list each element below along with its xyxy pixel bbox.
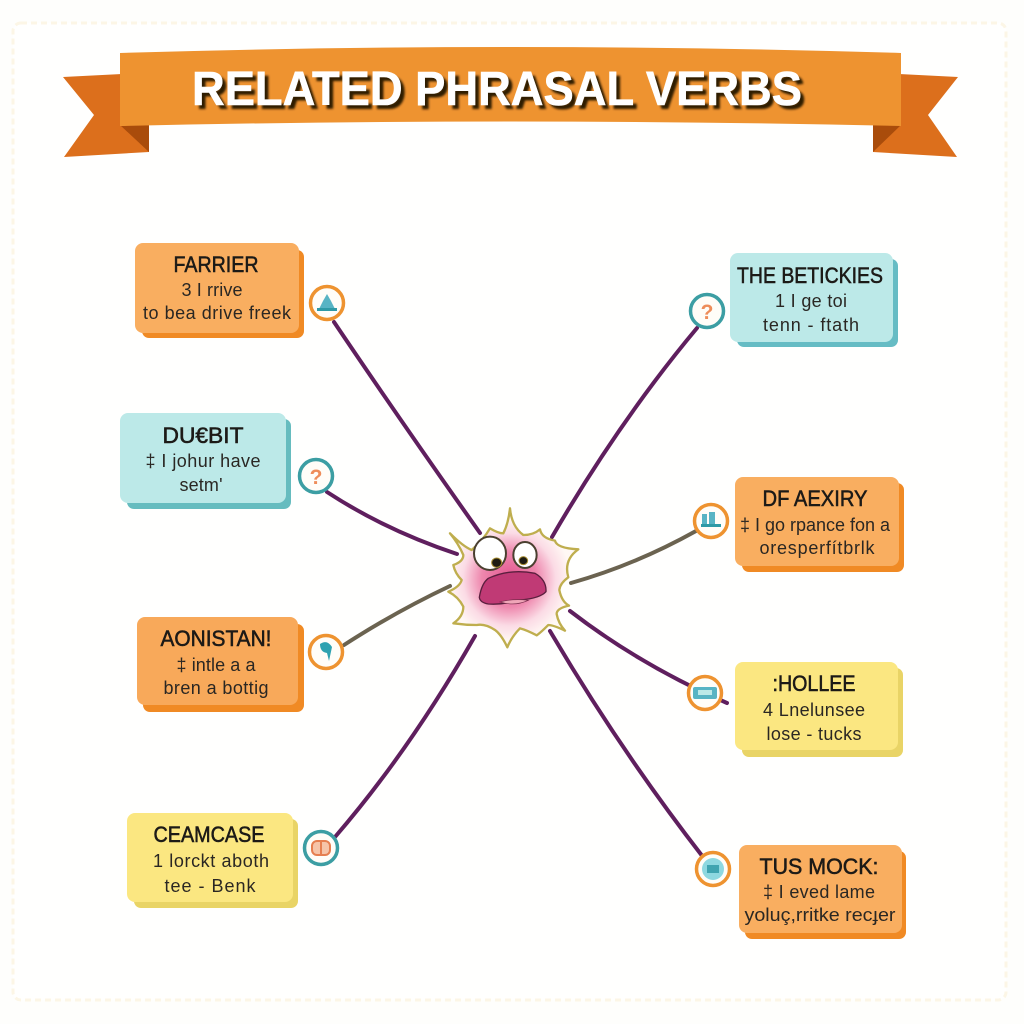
card: THE BETICKIES: tenn - ftath: [763, 315, 859, 335]
card: FARRIER: to bea drive freek: [143, 303, 292, 323]
card: CEAMCASE: tee - Benk: [164, 876, 256, 896]
left eye: [474, 537, 506, 570]
card: THE BETICKIES: 1 I ge toi: [775, 291, 847, 311]
icon: AONISTAN badge: [310, 636, 342, 668]
card: CEAMCASE: [127, 813, 298, 908]
card: FARRIER: FARRIER: [174, 252, 258, 277]
card: DF AEXIRY: oresperfítbrlk: [760, 538, 876, 558]
card: DUEBIT: ‡ I johur have: [146, 451, 260, 471]
card: CEAMCASE: CEAMCASE: [154, 822, 264, 847]
right ribbon tail: [873, 74, 958, 157]
card: TUS MOCK:: TUS MOCK:: [760, 854, 878, 879]
card: CEAMCASE: 1 lorckt aboth: [153, 851, 269, 871]
card: AONISTAN!: [137, 617, 304, 712]
card: HOLLEE: 4 Lnelunsee: [763, 700, 865, 720]
card: FARRIER: 3 I rrive: [182, 280, 242, 300]
icon: TUS MOCK badge: [696, 852, 730, 886]
card: AONISTAN!: bren a bottig: [164, 678, 268, 698]
lower lip: [500, 600, 528, 604]
card: TUS MOCK:: ‡ I eved lame: [763, 882, 875, 902]
card: THE BETICKIES: THE BETICKIES: [737, 263, 883, 288]
icon: THE BETICKIES badge: [690, 294, 724, 328]
icon: THE BETICKIES badge: ?: [701, 301, 713, 324]
card: DF AEXIRY: ‡ I go rpance fon a: [740, 515, 891, 535]
icon: CEAMCASE badge: [304, 832, 338, 864]
left ribbon fold: [120, 125, 149, 152]
right pupil: [519, 557, 528, 565]
burst outline: [448, 508, 578, 647]
card: HOLLEE: :HOLLEE: [772, 671, 856, 696]
card: DF AEXIRY: [735, 477, 904, 572]
mouth: [479, 572, 546, 604]
title banner: [63, 47, 958, 157]
card: HOLLEE: lose - tucks: [766, 724, 862, 744]
title text: RELATED PHRASAL VERBS: [196, 67, 806, 120]
card: DF AEXIRY: DF AEXIRY: [762, 486, 868, 511]
icon: DF AEXIRY badge: [694, 504, 728, 538]
card: DUEBIT: setm': [180, 475, 222, 495]
icon: FARRIER badge: [310, 286, 344, 320]
title banner: RELATED PHRASAL VERBS: [192, 63, 802, 116]
central character burst: [448, 508, 578, 647]
card: AONISTAN!: AONISTAN!: [160, 626, 272, 651]
left pupil: [492, 558, 502, 567]
left ribbon tail: [63, 74, 149, 157]
card: TUS MOCK:: [739, 845, 906, 939]
card: FARRIER: [135, 243, 304, 338]
connector lines: [327, 322, 727, 857]
card: DUEBIT: DU€BIT: [162, 423, 244, 448]
icon: HOLLEE badge: [688, 676, 722, 710]
card: THE BETICKIES: [730, 253, 898, 347]
card: DUEBIT: [120, 413, 291, 509]
card: TUS MOCK:: yoluç,rritke recɟer: [744, 905, 896, 925]
right eye: [513, 542, 537, 568]
card: AONISTAN!: ‡ intle a a: [176, 655, 256, 675]
right ribbon fold: [873, 125, 901, 152]
icon: DUEBIT badge: ?: [310, 466, 322, 489]
ribbon body: [120, 47, 901, 126]
card: HOLLEE: [735, 662, 903, 757]
icon: DUEBIT badge: [300, 460, 332, 492]
